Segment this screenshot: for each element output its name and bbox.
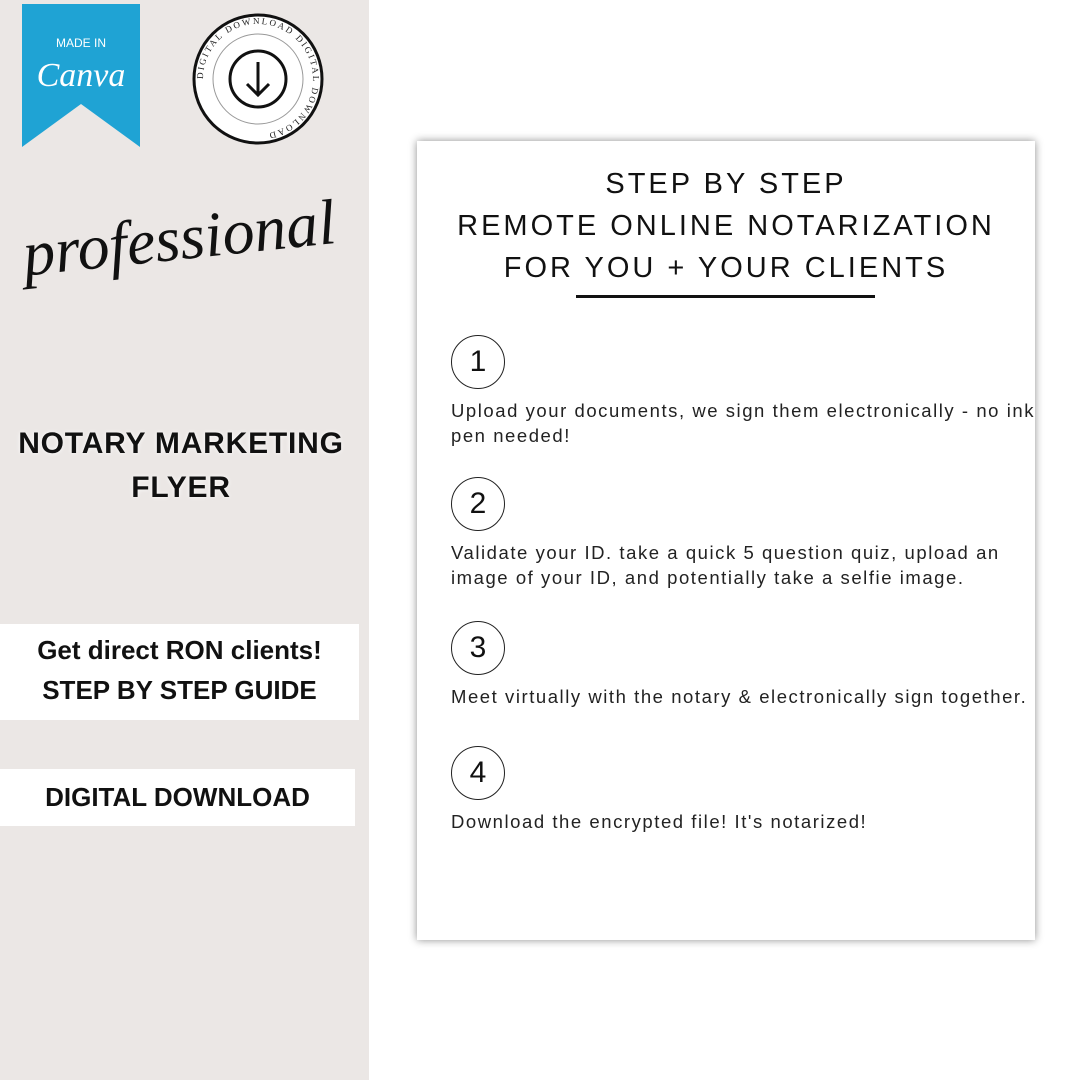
flyer title: STEP BY STEP: [605, 168, 847, 200]
step 1: pen needed!: [451, 425, 571, 446]
step 4: 4: [470, 756, 486, 789]
heading: notary marketing flyer: NOTARY MARKETING: [18, 427, 344, 460]
heading: notary marketing flyer: FLYER: [131, 471, 231, 504]
step 2: 2: [470, 487, 486, 520]
flyer card: [417, 141, 1035, 940]
icon: digital download badge: DIGITAL DOWNLOAD DIGITAL DOWNLOAD: [197, 18, 319, 138]
callout: step by step guide: Get direct RON clients!: [37, 635, 322, 665]
step 3: Meet virtually with the notary & electronically sign together.: [451, 686, 1027, 707]
step 2: image of your ID, and potentially take a selfie image.: [451, 567, 965, 588]
flyer title: FOR YOU + YOUR CLIENTS: [504, 252, 948, 284]
callout: digital download: [0, 769, 355, 826]
step 4: [451, 746, 867, 832]
step 1: Upload your documents, we sign them electronically - no ink: [451, 400, 1035, 421]
callout: digital download: DIGITAL DOWNLOAD: [45, 782, 310, 812]
flyer title: REMOTE ONLINE NOTARIZATION: [457, 210, 995, 242]
divider underline: [576, 295, 875, 298]
callout: step by step guide: [0, 624, 359, 720]
flyer title: [457, 168, 995, 284]
callout: step by step guide: STEP BY STEP GUIDE: [42, 675, 317, 705]
script heading: professional: professional: [19, 186, 339, 290]
step 3: 3: [470, 631, 486, 664]
step 2: [451, 477, 1000, 588]
left panel: [0, 0, 369, 1080]
step 3: [451, 621, 1027, 707]
heading: notary marketing flyer: [18, 427, 344, 504]
step 1: 1: [470, 345, 486, 378]
step 1: [451, 335, 1035, 446]
icon: made in canva ribbon: [22, 4, 140, 147]
step 4: Download the encrypted file! It's notarized!: [451, 811, 867, 832]
icon: made in canva ribbon: Canva: [37, 57, 125, 94]
step 2: Validate your ID. take a quick 5 question quiz, upload an: [451, 542, 1000, 563]
icon: made in canva ribbon: MADE IN: [56, 36, 106, 50]
